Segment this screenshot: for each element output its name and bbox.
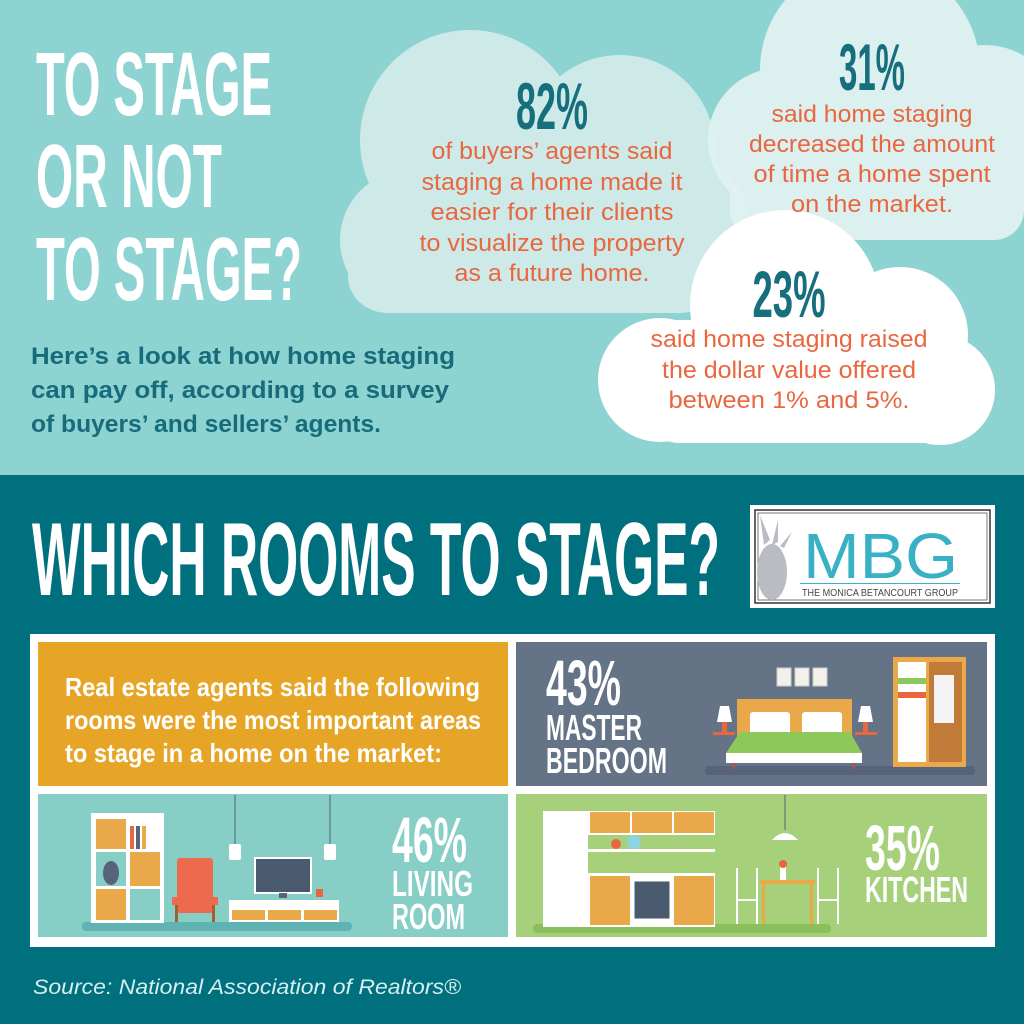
panel: kitchen	[516, 794, 987, 937]
panel: kitchen: 35%	[865, 812, 940, 884]
cloud: 82%: to visualize the property	[420, 230, 684, 257]
cloud: 82%	[340, 30, 750, 313]
text: 31%: said home staging	[772, 101, 972, 128]
subtitle: can pay off, according to a survey	[31, 377, 450, 404]
panel: master bedroom: 43%	[546, 647, 621, 719]
text: 23%	[650, 257, 928, 414]
icon: pineapple	[757, 515, 792, 600]
cloud shape: 23%	[598, 210, 995, 445]
logo: MBG: THE MONICA BETANCOURT GROUP	[802, 588, 958, 599]
panel: master bedroom: MASTER	[546, 707, 642, 748]
logo: MBG	[750, 505, 995, 608]
panel: living room: LIVING	[392, 863, 473, 904]
rooms frame	[30, 634, 995, 947]
text: 23%: 23%	[752, 257, 826, 331]
bottom background	[0, 475, 1024, 1024]
cloud shape: 31%	[708, 0, 1024, 240]
text: 31%: of time a home spent	[754, 161, 991, 188]
subtitle: of buyers’ and sellers’ agents.	[31, 411, 381, 438]
icon: bedroom illustration	[705, 657, 975, 775]
top background	[0, 0, 1024, 475]
cloud: 82%: 82%	[516, 69, 588, 143]
title: OR NOT	[36, 127, 222, 227]
panel: intro (orange): Real estate agents said the following	[65, 672, 480, 702]
cloud: 82%: staging a home made it	[422, 169, 683, 196]
title	[36, 35, 302, 320]
title: TO STAGE?	[36, 220, 302, 320]
text: 31%: 31%	[839, 30, 905, 104]
text: 23%: said home staging raised	[650, 326, 928, 353]
text: 23%: between 1% and 5%.	[668, 387, 910, 414]
text: 31%	[749, 30, 995, 218]
logo: MBG: MBG	[803, 520, 958, 592]
panel: intro (orange): rooms were the most important areas	[65, 705, 481, 735]
panel: intro (orange): to stage in a home on the market:	[65, 738, 442, 768]
panel: intro (orange)	[38, 642, 508, 786]
subtitle	[31, 343, 455, 438]
panel: living room: ROOM	[392, 896, 465, 937]
text: 31%: decreased the amount	[749, 131, 995, 158]
panel: kitchen: KITCHEN	[865, 869, 968, 910]
title: TO STAGE	[36, 35, 272, 135]
cloud: 82%: of buyers’ agents said	[432, 138, 672, 165]
subtitle: Here’s a look at how home staging	[31, 343, 455, 370]
source: Source: National Association of Realtors®	[33, 976, 462, 999]
icon: living room illustration	[82, 795, 352, 931]
text: 23%: the dollar value offered	[662, 357, 916, 384]
text: 31%: on the market.	[791, 191, 953, 218]
cloud: 82%: easier for their clients	[430, 199, 674, 226]
panel: master bedroom	[516, 642, 987, 786]
panel: living room: 46%	[392, 804, 467, 876]
panel: living room	[38, 794, 508, 937]
icon: kitchen illustration	[533, 795, 838, 933]
panel: master bedroom: BEDROOM	[546, 740, 667, 781]
cloud: 82%: as a future home.	[454, 260, 650, 287]
